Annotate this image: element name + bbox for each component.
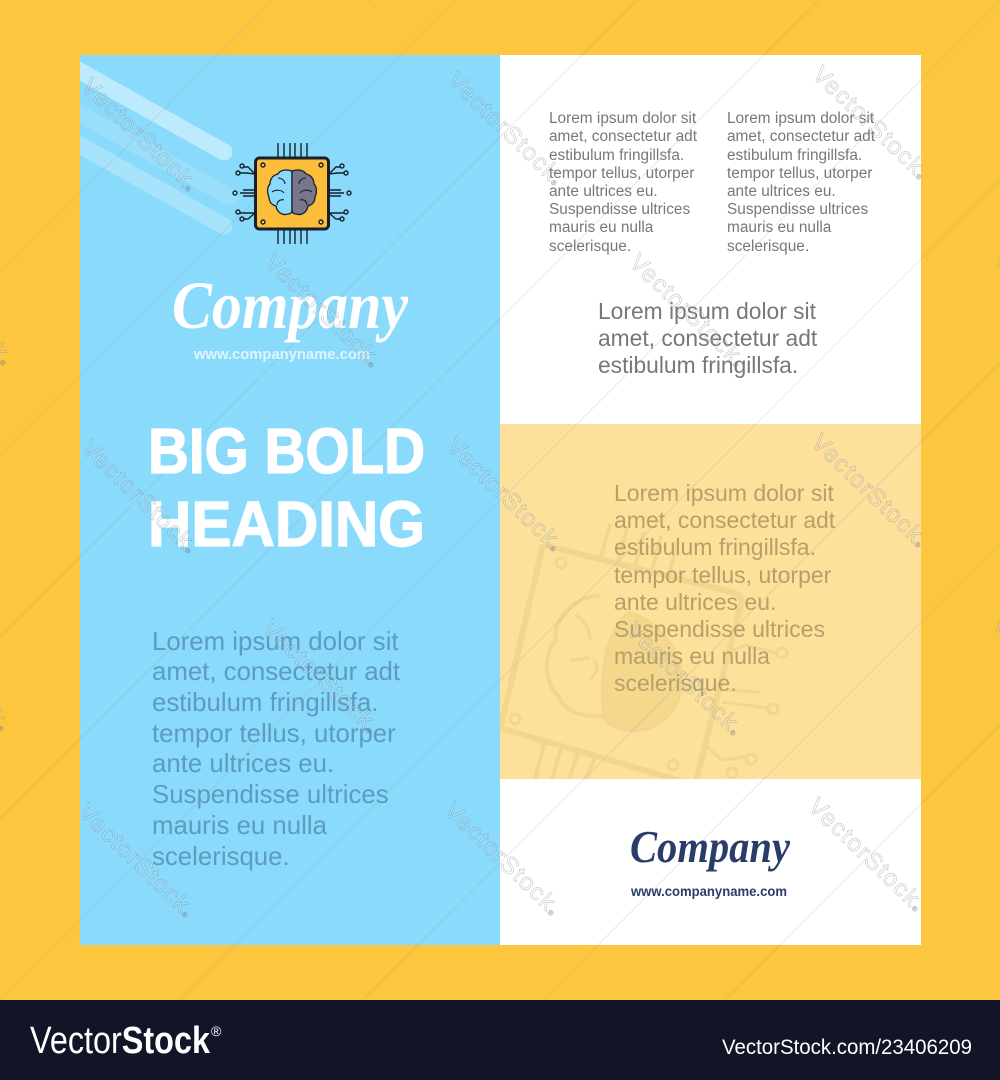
- panel: peach middle: [500, 424, 921, 779]
- text block: peach panel: Suspendisse ultrices: [614, 616, 825, 642]
- text block: top column two: estibulum fringillsfa.: [727, 147, 862, 164]
- watermarks: VectorStock®: [807, 61, 934, 185]
- text block: left body: scelerisque.: [152, 843, 290, 871]
- chip body: [256, 158, 328, 229]
- watermarks: VectorStock®: [439, 797, 566, 921]
- logo: company navy: Company: [630, 821, 791, 872]
- text block: left body: mauris eu nulla: [152, 812, 328, 840]
- watermarks: VectorStock®: [624, 249, 751, 373]
- text block: top column two: Lorem ipsum dolor sit: [727, 110, 875, 127]
- heading: big bold heading: BIG BOLD: [148, 415, 425, 487]
- watermarks: VectorStock®: [259, 249, 386, 373]
- brain right: [292, 170, 316, 215]
- text block: top column two: [727, 110, 876, 255]
- brain folds: [272, 178, 312, 205]
- text block: top column two: ante ultrices eu.: [727, 183, 836, 200]
- text block: top column two: scelerisque.: [727, 238, 809, 255]
- footer url: VectorStock.com/23406209: [722, 1036, 972, 1059]
- text block: top column one: Suspendisse ultrices: [549, 201, 690, 218]
- icon: chip with brain: [233, 143, 351, 244]
- text block: middle white: Lorem ipsum dolor sit: [598, 298, 817, 324]
- heading: big bold heading: HEADING: [148, 488, 425, 560]
- logo: company navy: www.companyname.com: [630, 884, 787, 899]
- text block: middle white: amet, consectetur adt: [598, 325, 818, 351]
- chip screws: [261, 163, 323, 224]
- text block: left body: ante ultrices eu.: [152, 750, 334, 778]
- text block: top column one: mauris eu nulla: [549, 219, 654, 236]
- text block: left body: Suspendisse ultrices: [152, 781, 389, 809]
- watermarks: VectorStock®: [441, 433, 568, 557]
- logo: company white: www.companyname.com: [193, 347, 370, 363]
- text block: top column one: [549, 110, 698, 255]
- watermarks: VectorStock®: [76, 73, 203, 197]
- text block: top column one: Lorem ipsum dolor sit: [549, 110, 697, 127]
- footer bar: [0, 1000, 1000, 1080]
- heading: big bold heading: [148, 415, 425, 560]
- logo: company navy: [630, 821, 791, 899]
- text block: middle white: [598, 298, 818, 378]
- text block: top column two: tempor tellus, utorper: [727, 165, 872, 182]
- circuit traces: [233, 164, 351, 221]
- text block: peach panel: [614, 480, 836, 696]
- text block: peach panel: tempor tellus, utorper: [614, 562, 832, 588]
- text block: top column one: scelerisque.: [549, 238, 631, 255]
- text block: top column one: estibulum fringillsfa.: [549, 147, 684, 164]
- text block: peach panel: mauris eu nulla: [614, 643, 770, 669]
- text block: top column one: amet, consectetur adt: [549, 128, 698, 145]
- watermarks: VectorStock®: [621, 617, 748, 741]
- text block: peach panel: Lorem ipsum dolor sit: [614, 480, 834, 506]
- text block: top column two: Suspendisse ultrices: [727, 201, 868, 218]
- text block: top column one: ante ultrices eu.: [549, 183, 658, 200]
- watermarks: VectorStock®: [806, 429, 933, 553]
- watermarks: VectorStock®: [803, 793, 930, 917]
- text block: peach panel: amet, consectetur adt: [614, 507, 836, 533]
- watermarks: VectorStock®: [442, 67, 569, 191]
- text block: left body: [152, 628, 400, 871]
- text block: left body: estibulum fringillsfa.: [152, 689, 379, 717]
- brain left: [268, 170, 292, 215]
- light stripes: [60, 60, 230, 226]
- watermarks: VectorStock®: [76, 435, 203, 559]
- panel: left blue: [60, 55, 500, 945]
- text block: left body: tempor tellus, utorper: [152, 720, 396, 748]
- chip pins: [278, 143, 307, 244]
- icon: faded chip background: [500, 524, 787, 785]
- text block: top column two: amet, consectetur adt: [727, 128, 876, 145]
- watermarks: VectorStock®: [73, 799, 200, 923]
- text block: peach panel: scelerisque.: [614, 670, 737, 696]
- footer brand: VectorStock: [30, 1020, 211, 1062]
- footer registered mark: ®: [211, 1023, 222, 1039]
- text block: peach panel: ante ultrices eu.: [614, 589, 776, 615]
- text block: left body: Lorem ipsum dolor sit: [152, 628, 399, 656]
- panel: top right white: [500, 55, 921, 424]
- logo: company white: Company: [172, 267, 409, 343]
- text block: top column one: tempor tellus, utorper: [549, 165, 694, 182]
- text block: top column two: mauris eu nulla: [727, 219, 832, 236]
- text block: left body: amet, consectetur adt: [152, 658, 400, 686]
- panel: bottom right white: [500, 779, 921, 945]
- text block: middle white: estibulum fringillsfa.: [598, 352, 798, 378]
- watermarks: VectorStock®: [257, 615, 384, 739]
- text block: peach panel: estibulum fringillsfa.: [614, 534, 816, 560]
